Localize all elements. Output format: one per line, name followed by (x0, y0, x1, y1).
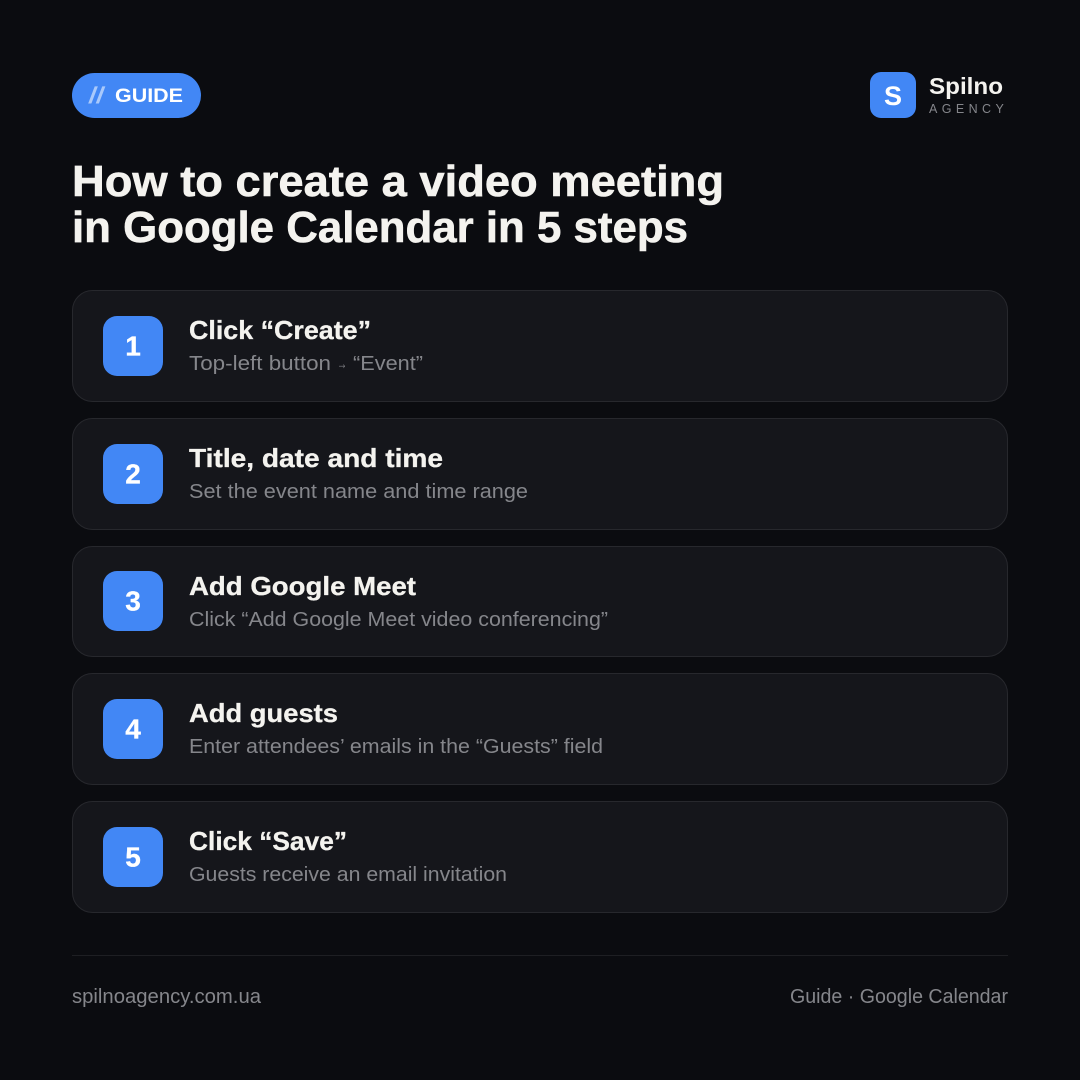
logo mark: S (884, 81, 902, 111)
step 2 number (103, 444, 163, 504)
badge label: GUIDE (115, 86, 183, 107)
step 5 number (103, 827, 163, 887)
panel: step 2 (72, 418, 1008, 530)
step 1 description: “Event” (353, 353, 423, 375)
step 2 description: Set the event name and time range (189, 481, 528, 503)
step 5 number: 5 (125, 842, 141, 872)
title: How to create a video meeting (72, 157, 724, 206)
title (72, 157, 724, 252)
step 1 description (189, 353, 423, 375)
title: in Google Calendar in 5 steps (72, 203, 688, 252)
panel: step 1 (72, 290, 1008, 402)
step 3 description: Click “Add Google Meet video conferencing” (189, 609, 608, 631)
step 3 heading: Add Google Meet (189, 571, 416, 601)
step 5 description: Guests receive an email invitation (189, 864, 507, 886)
step 4 heading: Add guests (189, 698, 338, 728)
step 1 description: → (337, 354, 347, 373)
panel: step 3 (72, 546, 1008, 656)
panel: step 4 (72, 674, 1008, 784)
step 2 number: 2 (125, 458, 141, 490)
footer: website: spilnoagency.com.ua (72, 986, 262, 1008)
badge slashes: // (87, 82, 107, 108)
step 3 number (103, 571, 163, 631)
step 4 number (103, 699, 163, 759)
logo: Spilno Agency (870, 72, 1008, 118)
step 1 description: Top-left button (189, 353, 331, 375)
logo wordmark: Spilno (929, 73, 1003, 99)
logo subtitle: AGENCY (929, 102, 1008, 116)
step 4 description: Enter attendees’ emails in the “Guests” field (189, 736, 603, 758)
footer: topic: Guide · Google Calendar (790, 986, 1008, 1008)
panel: step 5 (72, 802, 1008, 912)
step 4 number: 4 (125, 714, 141, 744)
badge: guide (72, 73, 201, 118)
step 1 number: 1 (125, 330, 141, 362)
step 1 number (103, 316, 163, 376)
step 2 heading: Title, date and time (189, 443, 443, 473)
step 5 heading: Click “Save” (189, 826, 347, 856)
step 3 number: 3 (125, 586, 141, 616)
step 1 heading: Click “Create” (189, 315, 371, 345)
